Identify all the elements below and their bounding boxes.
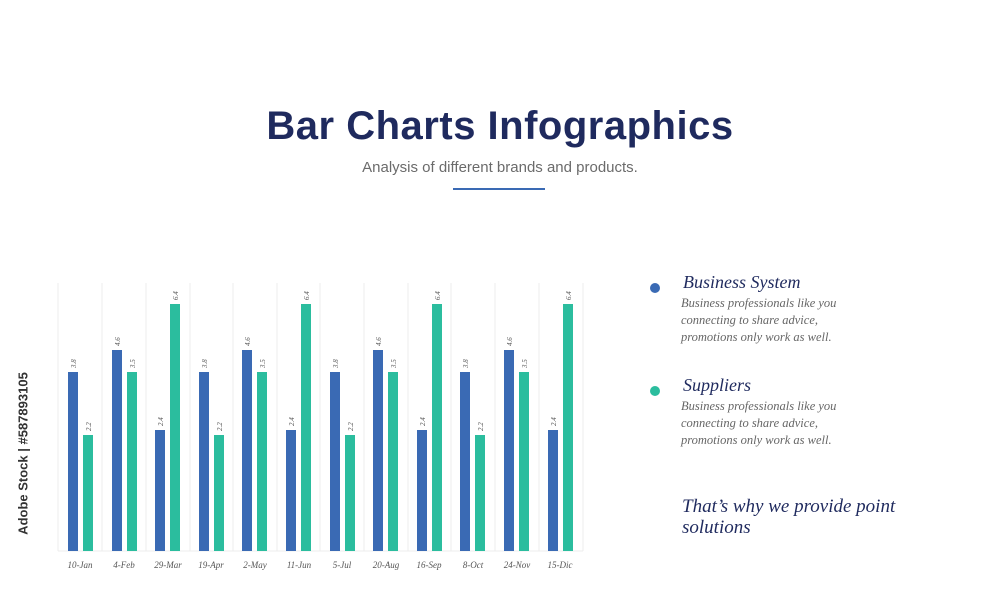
bar chart: 10-Jan	[68, 560, 93, 570]
bar chart: 2.2	[85, 422, 93, 431]
bar chart: 20-Aug	[373, 560, 400, 570]
bar chart: 4.6	[114, 337, 122, 346]
bar chart: 3.8	[462, 359, 470, 369]
bar chart: 2.2	[477, 422, 485, 431]
bar chart: 16-Sep	[416, 560, 442, 570]
bar chart: 4-Feb	[113, 560, 135, 570]
bar chart: 4.6	[244, 337, 252, 346]
icon: blue dot	[650, 283, 660, 293]
description: Business professionals like you connecting to share advice, promotions only work as well.	[681, 296, 836, 344]
legend item: Suppliers	[650, 375, 836, 447]
bar chart: 19-Apr	[198, 560, 224, 570]
bar chart: 2.4	[550, 417, 558, 426]
bar chart: 3.5	[129, 359, 137, 369]
bar chart: 3.5	[259, 359, 267, 369]
bar chart: 24-Nov	[504, 560, 530, 570]
bar chart: 5-Jul	[333, 560, 352, 570]
bar chart: 2.4	[288, 417, 296, 426]
bar chart: 8-Oct	[463, 560, 484, 570]
bar chart: 6.4	[303, 291, 311, 300]
bar chart: 29-Mar	[154, 560, 182, 570]
icon: green dot	[650, 386, 660, 396]
bar chart: 2.4	[419, 417, 427, 426]
bar chart: 3.8	[201, 359, 209, 369]
description: Business professionals like you connecting to share advice, promotions only work as well.	[681, 399, 836, 447]
bar chart: 3.5	[390, 359, 398, 369]
closing statement: That’s why we provide point solutions	[682, 496, 895, 538]
legend item: Business System	[650, 272, 836, 344]
bar chart: 2.2	[216, 422, 224, 431]
bar chart: 2.4	[157, 417, 165, 426]
bar chart: 2.2	[347, 422, 355, 431]
side watermark text: Adobe Stock | #587893105	[16, 372, 30, 535]
subtitle: Analysis of different brands and products.	[362, 159, 638, 176]
divider line	[453, 188, 545, 190]
bar chart: 11-Jun	[287, 560, 312, 570]
bar chart: 3.5	[521, 359, 529, 369]
bar chart: 2-May	[243, 560, 267, 570]
bar chart: 15-Dic	[548, 560, 572, 570]
heading: Business System	[683, 272, 800, 292]
bar chart: 6.4	[172, 291, 180, 300]
title: Bar Charts Infographics	[266, 104, 734, 148]
bar chart: 6.4	[565, 291, 573, 300]
bar chart: 3.8	[332, 359, 340, 369]
heading: Suppliers	[683, 375, 751, 395]
bar chart: 6.4	[434, 291, 442, 300]
bar chart: 4.6	[375, 337, 383, 346]
bar chart: 3.8	[70, 359, 78, 369]
bar chart: 4.6	[506, 337, 514, 346]
